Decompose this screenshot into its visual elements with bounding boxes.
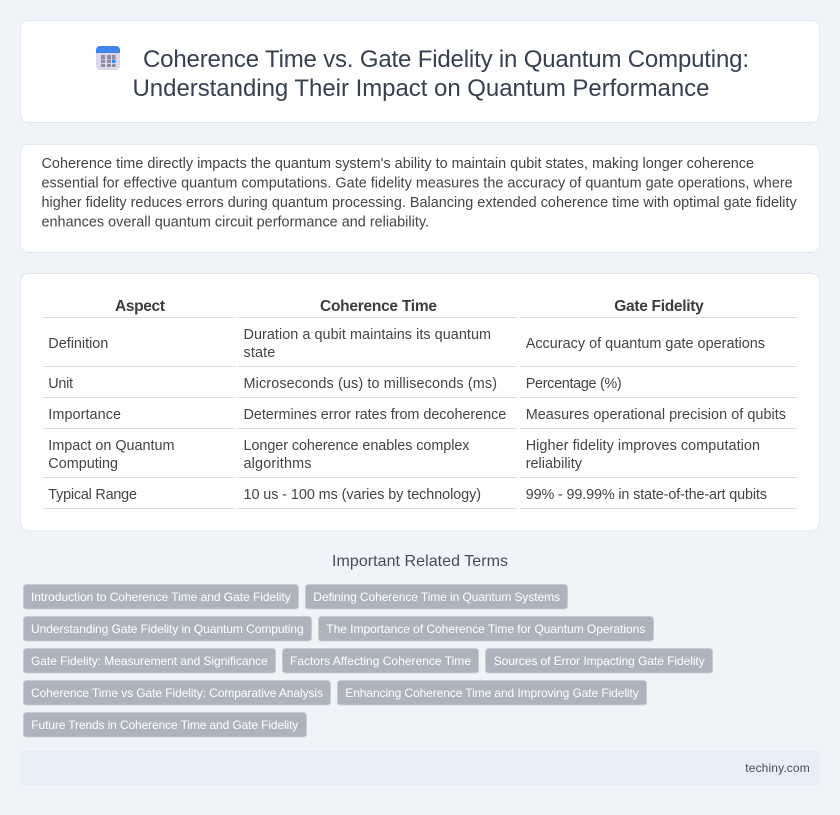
text block: summary: Coherence time directly impacts the quantum system's ability to maintain qubit states, making longer coherence bbox=[42, 156, 754, 172]
text block: summary: essential for effective quantum computations. Gate fidelity measures the accuracy of quantum gate operations, where bbox=[42, 176, 793, 192]
tag bbox=[24, 712, 306, 737]
panel: summary paragraph bbox=[20, 144, 820, 252]
tag bbox=[486, 648, 712, 673]
table row: definition: state bbox=[244, 345, 275, 361]
text block: summary: enhances overall quantum circuit performance and reliability. bbox=[42, 214, 429, 230]
table row: typical range: 10 us - 100 ms (varies by technology) bbox=[244, 487, 481, 503]
table row: typical range: 99% - 99.99% in state-of-the-art qubits bbox=[526, 487, 767, 503]
tag list: related terms bbox=[24, 584, 712, 737]
tag bbox=[24, 616, 312, 641]
footer: source credit bbox=[20, 751, 820, 785]
tag: Gate Fidelity: Measurement and Significance bbox=[31, 654, 268, 668]
tag: Understanding Gate Fidelity in Quantum Computing bbox=[31, 622, 304, 636]
table row: definition bbox=[43, 327, 797, 367]
table header bbox=[43, 298, 797, 318]
tag: The Importance of Coherence Time for Quantum Operations bbox=[326, 622, 645, 636]
table row: importance bbox=[43, 407, 797, 429]
table row: definition: Definition bbox=[48, 336, 108, 352]
panel: comparison table bbox=[20, 274, 820, 531]
tag: Factors Affecting Coherence Time bbox=[290, 654, 471, 668]
tag: Coherence Time vs Gate Fidelity: Comparative Analysis bbox=[31, 686, 323, 700]
table header: Gate Fidelity bbox=[614, 298, 704, 315]
table row: impact on quantum computing bbox=[43, 438, 797, 478]
table row: importance: Determines error rates from decoherence bbox=[244, 407, 506, 423]
text block: summary bbox=[42, 156, 797, 230]
table row: typical range: Typical Range bbox=[48, 487, 137, 503]
table row: unit: Unit bbox=[48, 376, 73, 392]
tag bbox=[24, 584, 298, 609]
text block: summary: higher fidelity reduces errors during quantum processing. Balancing extended coherence time with optimal gate fidelity bbox=[42, 195, 797, 211]
table row: unit: Microseconds (us) to milliseconds (ms) bbox=[244, 376, 497, 392]
title: Coherence Time vs. Gate Fidelity in Quantum Computing: bbox=[143, 46, 749, 73]
title bbox=[132, 46, 749, 102]
table row: definition: Duration a qubit maintains its quantum bbox=[244, 327, 491, 343]
tag bbox=[306, 584, 568, 609]
tag bbox=[318, 616, 654, 641]
tag bbox=[24, 648, 276, 673]
table row: importance: Measures operational precision of qubits bbox=[526, 407, 786, 423]
tag: Enhancing Coherence Time and Improving Gate Fidelity bbox=[345, 686, 639, 700]
table row: impact on quantum computing: reliability bbox=[526, 456, 583, 472]
table row: impact on quantum computing: Impact on Quantum bbox=[48, 438, 174, 454]
table row: impact on quantum computing: Higher fidelity improves computation bbox=[526, 438, 760, 454]
table row: impact on quantum computing: algorithms bbox=[244, 456, 312, 472]
tag bbox=[338, 680, 646, 705]
table header: Coherence Time bbox=[320, 298, 437, 315]
tag: Introduction to Coherence Time and Gate Fidelity bbox=[31, 590, 291, 604]
table row: definition: Accuracy of quantum gate operations bbox=[526, 336, 765, 352]
table row: impact on quantum computing: Computing bbox=[48, 456, 118, 472]
table header: Aspect bbox=[115, 298, 165, 315]
panel: header bbox=[20, 20, 820, 122]
icon: quantum chip bbox=[96, 46, 120, 70]
table row: impact on quantum computing: Longer coherence enables complex bbox=[244, 438, 470, 454]
tag bbox=[24, 680, 330, 705]
tag: Defining Coherence Time in Quantum Systems bbox=[313, 590, 560, 604]
table row: unit: Percentage (%) bbox=[526, 376, 622, 392]
heading: important related terms: Important Related Terms bbox=[332, 553, 508, 570]
tag: Sources of Error Impacting Gate Fidelity bbox=[494, 654, 705, 668]
title: Understanding Their Impact on Quantum Performance bbox=[132, 75, 710, 102]
table row: unit bbox=[43, 376, 797, 398]
table row: typical range bbox=[43, 487, 797, 509]
tag bbox=[282, 648, 478, 673]
table row: importance: Importance bbox=[48, 407, 121, 423]
footer: source credit: techiny.com bbox=[745, 761, 810, 775]
tag: Future Trends in Coherence Time and Gate Fidelity bbox=[31, 718, 298, 732]
